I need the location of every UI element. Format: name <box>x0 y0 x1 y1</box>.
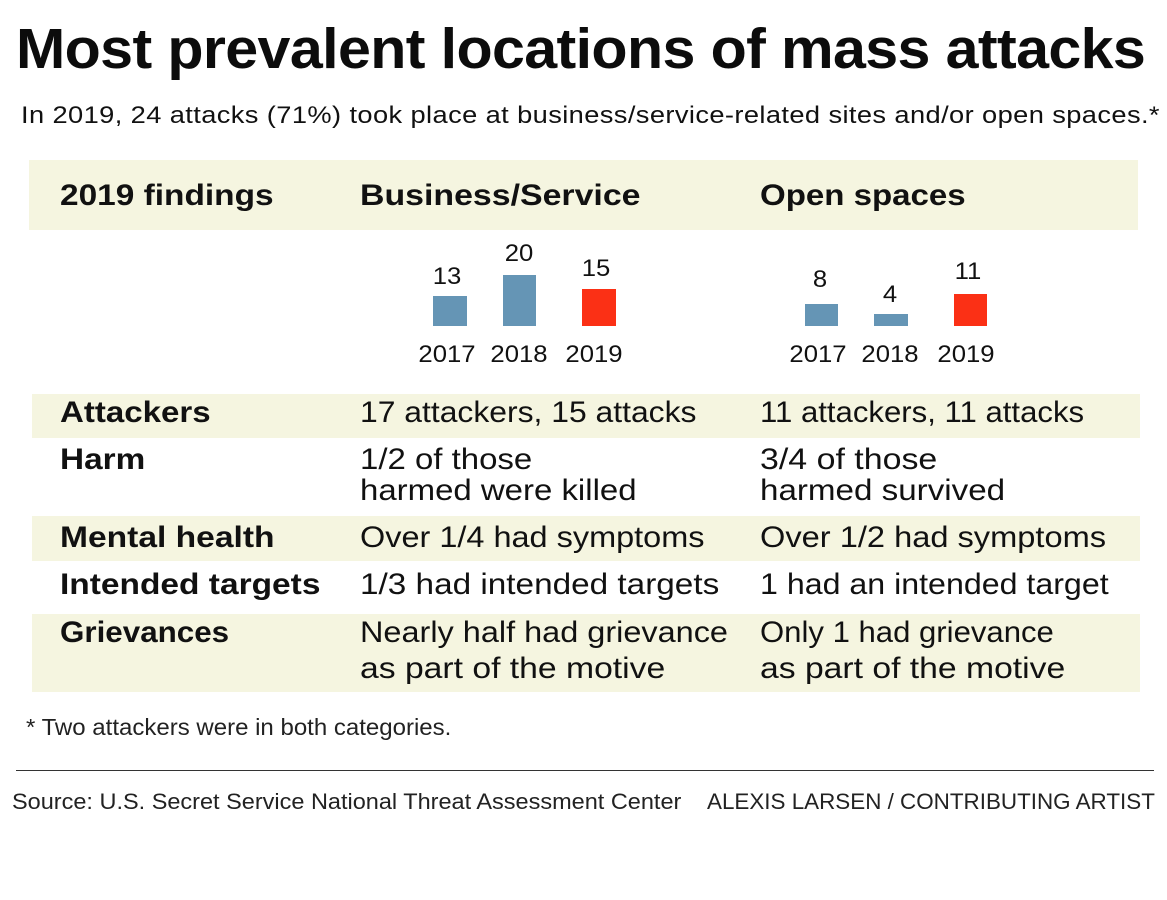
bar chart: business/service: 2019 <box>565 341 623 368</box>
row: harm: 3/4 of those <box>760 443 937 476</box>
row: intended targets: 1/3 had intended targets <box>360 568 719 601</box>
bar chart: business/service: 13 <box>433 263 461 290</box>
row: mental health: Over 1/2 had symptoms <box>760 521 1106 554</box>
bar chart: open spaces: 11 <box>955 258 981 285</box>
row: grievances: as part of the motive <box>360 652 665 685</box>
row: attackers: 17 attackers, 15 attacks <box>360 396 696 429</box>
bar chart: business/service: 20 <box>505 240 533 267</box>
row: mental health <box>60 521 1106 554</box>
bar chart: business/service <box>418 240 623 368</box>
row band: attackers <box>32 394 1140 438</box>
header: Business/Service: Business/Service <box>360 179 641 212</box>
row: grievances: as part of the motive <box>760 652 1065 685</box>
footnote: * Two attackers were in both categories. <box>26 714 451 740</box>
title: Most prevalent locations of mass attacks <box>16 17 1145 81</box>
source: Source: U.S. Secret Service National Threat Assessment Center <box>12 789 681 814</box>
bar chart: open spaces: 2017 <box>789 341 847 368</box>
bar chart: open spaces: 2018 <box>861 341 919 368</box>
row: harm: harmed were killed <box>360 474 637 507</box>
row band: mental health <box>32 516 1140 561</box>
header: 2019 findings: 2019 findings <box>60 179 274 212</box>
bar chart: open spaces <box>789 258 995 368</box>
row: mental health: Mental health <box>60 521 275 554</box>
row: attackers: 11 attackers, 11 attacks <box>760 396 1084 429</box>
bar chart: open spaces: 2019 <box>937 341 995 368</box>
bar chart: open spaces: 4 <box>883 281 897 308</box>
row: grievances: Nearly half had grievance <box>360 616 728 649</box>
subtitle: In 2019, 24 attacks (71%) took place at business/service-related sites and/or open spaces.* <box>21 102 1160 129</box>
row: harm <box>60 443 1005 507</box>
row: intended targets: Intended targets <box>60 568 320 601</box>
table header band <box>29 160 1138 230</box>
row: grievances <box>60 616 1065 685</box>
row: mental health: Over 1/4 had symptoms <box>360 521 704 554</box>
row: harm: Harm <box>60 443 145 476</box>
row: harm: harmed survived <box>760 474 1005 507</box>
row: grievances: Only 1 had grievance <box>760 616 1054 649</box>
bar chart: business/service: 2018 <box>490 341 548 368</box>
row: harm: 1/2 of those <box>360 443 532 476</box>
row: intended targets: 1 had an intended target <box>760 568 1109 601</box>
credit: ALEXIS LARSEN / CONTRIBUTING ARTIST <box>707 789 1155 814</box>
header: Open spaces: Open spaces <box>760 179 966 212</box>
row: grievances: Grievances <box>60 616 229 649</box>
row: intended targets <box>60 568 1109 601</box>
bar chart: business/service: 2017 <box>418 341 476 368</box>
row band: grievances <box>32 614 1140 692</box>
bar chart: business/service: 15 <box>582 255 610 282</box>
bar chart: open spaces: 8 <box>813 266 827 293</box>
row: attackers <box>60 396 1084 429</box>
row: attackers: Attackers <box>60 396 211 429</box>
